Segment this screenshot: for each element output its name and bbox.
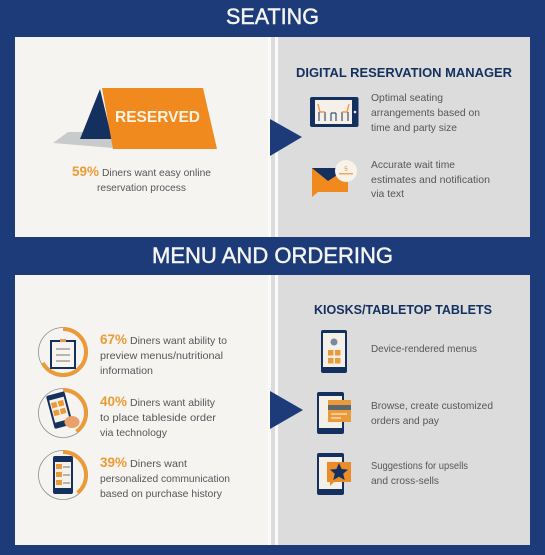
text: upsells — [371, 460, 468, 487]
text: 40% tableside order: Diners want ability — [130, 397, 216, 409]
icon: message envelope — [312, 160, 357, 197]
text: 39% personalized communication: based on purchase history — [100, 488, 223, 500]
text: accurate wait time: estimates and notification — [371, 174, 490, 186]
text: 39% personalized communication: 39% — [100, 454, 128, 470]
text: 39% personalized communication: personalized communication — [100, 473, 230, 485]
icon: clipboard ring — [38, 328, 88, 376]
text: upsells: Suggestions for upsells — [371, 460, 468, 472]
panel: digital reservation manager — [278, 37, 530, 237]
panel: menu left — [15, 275, 268, 545]
icon: tablet with star — [317, 453, 351, 495]
icon: tablet with seating — [310, 97, 358, 127]
title: seating: SEATING — [226, 4, 319, 29]
heading: kiosks/tabletop tablets: KIOSKS/TABLETOP TABLETS — [314, 302, 492, 317]
text: 40% tableside order: 40% — [100, 393, 128, 409]
text: 59% online reservation: reservation process — [97, 182, 186, 194]
icon: phone list ring — [38, 450, 88, 500]
text: 59% online reservation — [72, 163, 211, 194]
icon: phone in hand ring — [38, 388, 88, 438]
text: accurate wait time: Accurate wait time — [371, 159, 455, 171]
text: 59% online reservation: 59% — [72, 163, 100, 179]
text: browse and customize: orders and pay — [371, 415, 440, 427]
panel: seating left — [15, 37, 268, 237]
text: 40% tableside order: via technology — [100, 427, 168, 439]
icon: tablet with card — [317, 392, 351, 434]
icon: tablet with menu — [321, 330, 347, 373]
text: 67% preview menus: preview menus/nutritional — [100, 350, 223, 362]
heading: digital reservation manager: DIGITAL RESERVATION MANAGER — [296, 65, 513, 80]
title: menu and ordering: MENU AND ORDERING — [152, 243, 393, 268]
text: 39% personalized communication: Diners want — [130, 458, 187, 470]
text: 67% preview menus: information — [100, 365, 153, 377]
text: upsells: and cross-sells — [371, 475, 439, 487]
text: accurate wait time: via text — [371, 188, 404, 200]
text: 40% tableside order: to place tableside order — [100, 412, 217, 424]
panel: kiosks and tabletop tablets — [278, 275, 530, 545]
arrow: menu — [270, 391, 303, 429]
text: optimal seating — [371, 92, 480, 134]
text: 67% preview menus: Diners want ability to — [130, 335, 227, 347]
text: browse and customize — [371, 400, 493, 427]
text: device-rendered menus: Device-rendered menus — [371, 343, 477, 355]
text: optimal seating: arrangements based on — [371, 107, 480, 119]
text: 40% tableside order — [100, 393, 217, 439]
icon: message envelope: 5 — [344, 167, 348, 173]
text: 39% personalized communication — [100, 454, 230, 500]
text: 67% preview menus: 67% — [100, 331, 128, 347]
text: 67% preview menus — [100, 331, 227, 377]
text: optimal seating: Optimal seating — [371, 92, 443, 104]
text: optimal seating: time and party size — [371, 122, 457, 134]
icon: reserved table tent — [53, 88, 217, 149]
text: accurate wait time — [371, 159, 490, 200]
arrow: seating — [270, 119, 302, 156]
text: 59% online reservation: Diners want easy online — [102, 167, 211, 179]
icon: reserved table tent: RESERVED — [115, 109, 200, 126]
text: browse and customize: Browse, create customized — [371, 400, 493, 412]
